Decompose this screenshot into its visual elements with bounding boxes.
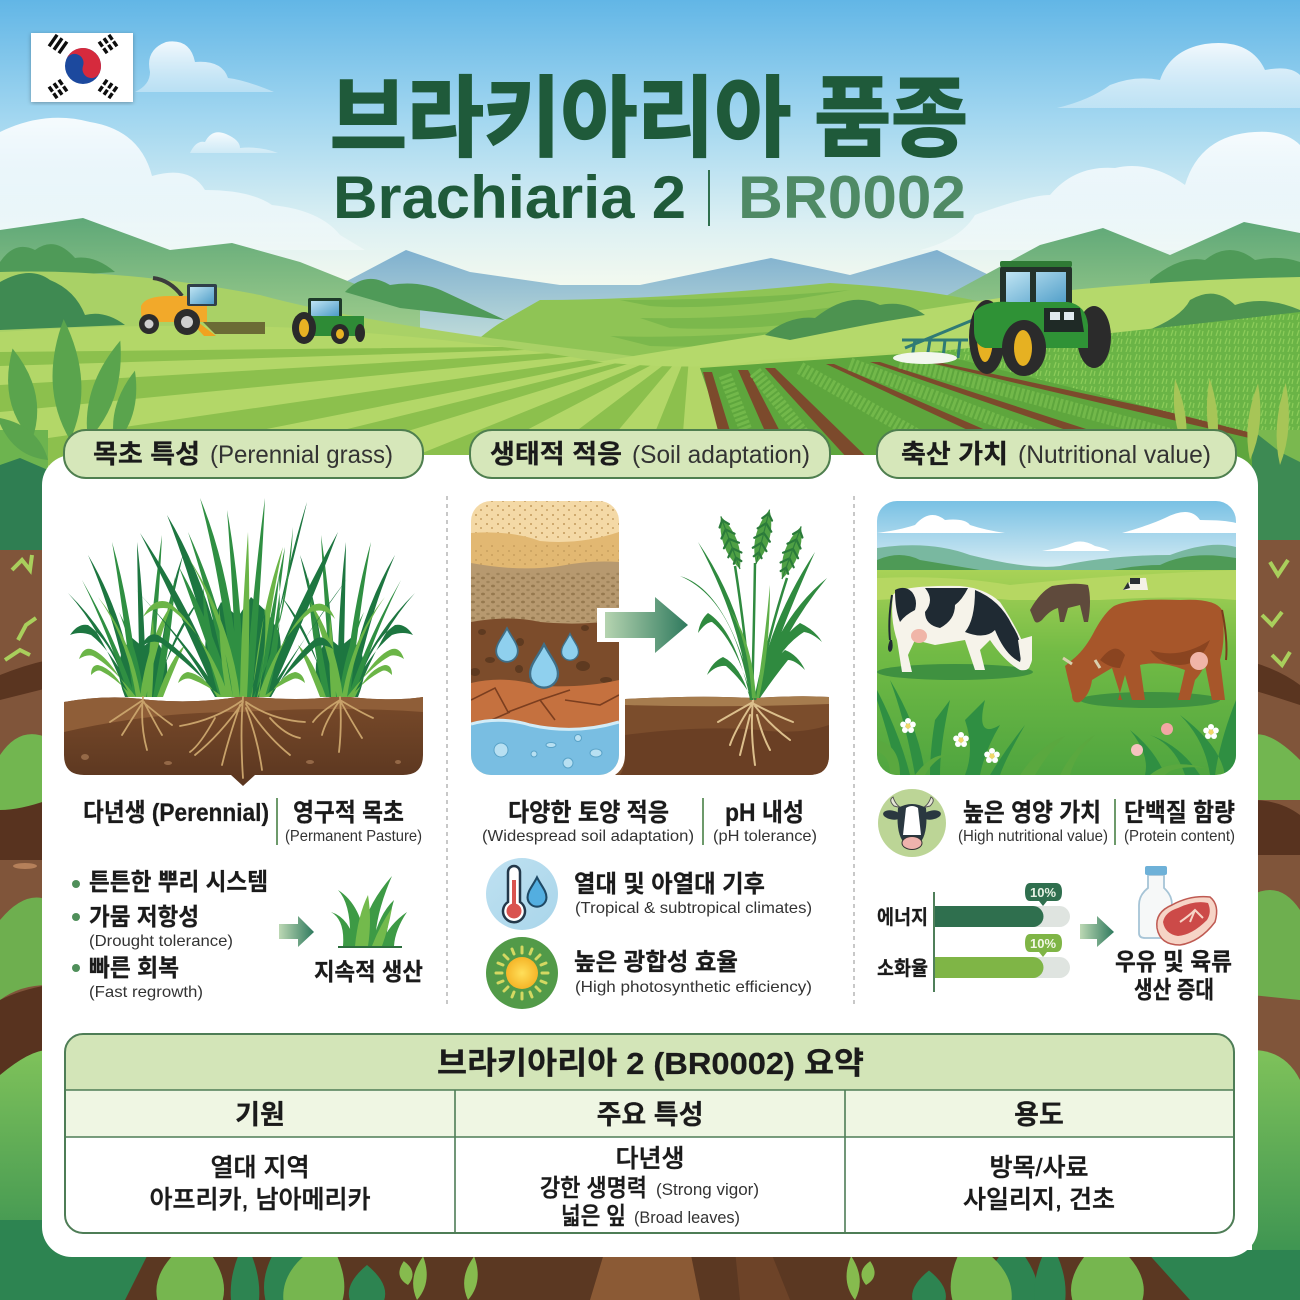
bullet list: grass traits: (Fast regrowth) <box>89 984 203 1001</box>
foreground grass and flowers <box>877 680 1236 775</box>
icon: grass tuft <box>331 876 407 948</box>
label: increased milk and meat production <box>1115 949 1232 1004</box>
column: main traits: 강한 생명력 <box>540 1175 647 1202</box>
column: main traits: 넓은 잎 <box>561 1203 626 1230</box>
text: soil adaptation and pH tolerance: pH 내성 <box>725 799 804 827</box>
text: tropical climates: (Tropical & subtropical climates) <box>575 900 812 917</box>
table title: 브라키아리아 2 (BR0002) 요약 <box>437 1046 864 1081</box>
section heading: nutritional value: (Nutritional value) <box>1018 441 1211 469</box>
text: perennial and permanent pasture: 다년생 (Perennial) <box>83 799 269 827</box>
holstein cow <box>888 586 1032 672</box>
text: nutritional value and protein: 단백질 함량 <box>1124 799 1235 827</box>
icon: orange combine harvester <box>139 278 265 336</box>
illustration: grass clumps with roots in soil <box>64 498 423 786</box>
section heading: nutritional value <box>877 430 1236 478</box>
column: origin: 아프리카, 남아메리카 <box>150 1186 370 1214</box>
section heading: nutritional value: 축산 가치 <box>901 439 1008 469</box>
label: increased milk and meat production: 우유 및 육류 <box>1115 949 1232 976</box>
bar chart: energy and digestibility: 에너지 <box>877 906 928 929</box>
section heading: perennial grass: (Perennial grass) <box>210 441 393 469</box>
text: perennial and permanent pasture: 영구적 목초 <box>293 799 404 827</box>
section heading: soil adaptation: (Soil adaptation) <box>632 441 810 469</box>
arrow: to sustained production <box>279 916 314 947</box>
flag of South Korea <box>31 33 133 102</box>
column: origin: 열대 지역 <box>211 1154 309 1182</box>
label: increased milk and meat production: 생산 증대 <box>1134 977 1214 1004</box>
column: main traits: 다년생 <box>615 1145 685 1173</box>
background: bottom strip of soil and leaves <box>0 1220 1300 1300</box>
bullet list: grass traits <box>72 869 268 1001</box>
section heading: perennial grass <box>64 430 423 478</box>
text: perennial and permanent pasture: (Permanent Pasture) <box>285 828 422 845</box>
column: main traits <box>540 1100 759 1230</box>
background: left side strip of soil and leaves <box>0 430 48 1300</box>
text: nutritional value and protein: 높은 영양 가치 <box>963 799 1101 827</box>
illustration: soil profile layers <box>470 501 619 775</box>
text: photosynthetic efficiency: 높은 광합성 효율 <box>574 949 738 976</box>
icon: small green tractor <box>292 298 365 344</box>
bullet list: grass traits: 빠른 회복 <box>89 955 179 982</box>
arrow: to milk and meat production <box>1080 916 1114 947</box>
bullet list: grass traits: 가뭄 저항성 <box>89 904 199 931</box>
text: photosynthetic efficiency: (High photosynthetic efficiency) <box>575 979 812 996</box>
bar chart: energy and digestibility: 소화율 <box>877 957 928 980</box>
title: 브라키아리아 품종 <box>330 69 968 168</box>
bullet list: grass traits: 튼튼한 뿌리 시스템 <box>89 869 268 896</box>
section heading: soil adaptation <box>470 430 830 478</box>
background: textured crop field at right <box>930 312 1300 445</box>
text: soil adaptation and pH tolerance: (pH tolerance) <box>713 828 817 845</box>
column: main traits: (Strong vigor) <box>656 1180 759 1199</box>
icon: milk bottle and steak <box>1139 866 1217 945</box>
text: tropical climates <box>574 871 812 917</box>
brown cow <box>1063 600 1226 702</box>
text: perennial and permanent pasture <box>83 798 422 845</box>
icon: large green tractor with harrow <box>893 261 1111 376</box>
text: nutritional value and protein: (High nutritional value) <box>958 828 1108 845</box>
title: Brachiaria 2 <box>333 164 686 231</box>
bar chart: energy and digestibility: 10% <box>1030 885 1056 900</box>
text: soil adaptation and pH tolerance: (Widespread soil adaptation) <box>482 828 694 845</box>
text: soil adaptation and pH tolerance: 다양한 토양 적응 <box>508 799 669 827</box>
background: mountains and hills <box>0 218 1300 470</box>
text: nutritional value and protein <box>958 799 1235 845</box>
background: right side strip of soil and leaves <box>1252 430 1300 1300</box>
bullet list: grass traits: (Drought tolerance) <box>89 933 233 950</box>
text: photosynthetic efficiency <box>574 949 812 996</box>
column: uses: 용도 <box>1014 1100 1064 1130</box>
background: foliage at upper corners <box>0 318 1292 468</box>
section heading: perennial grass: 목초 특성 <box>93 439 200 469</box>
background: sky with clouds <box>0 0 1300 300</box>
column: origin: 기원 <box>235 1100 285 1130</box>
label: sustained production: 지속적 생산 <box>314 959 423 986</box>
icon: sun <box>486 937 558 1009</box>
column: main traits: (Broad leaves) <box>634 1208 740 1227</box>
column: origin <box>150 1100 370 1214</box>
arrow: soil to plant <box>601 597 688 653</box>
illustration: plant growing in soil <box>615 508 829 775</box>
small brown cow <box>1030 584 1090 622</box>
far holstein cow <box>1123 578 1148 590</box>
title <box>330 69 968 231</box>
column: uses: 방목/사료 <box>990 1154 1088 1182</box>
icon: thermometer and water drop <box>486 858 558 930</box>
section heading: soil adaptation: 생태적 적응 <box>490 439 622 469</box>
column: main traits: 주요 특성 <box>597 1100 703 1130</box>
column: uses: 사일리지, 건초 <box>963 1186 1115 1214</box>
text: soil adaptation and pH tolerance <box>482 798 817 845</box>
background: striped foreground fields <box>0 320 1300 470</box>
text: nutritional value and protein: (Protein content) <box>1124 828 1235 845</box>
illustration: cows grazing in pasture <box>877 501 1236 775</box>
bar chart: energy and digestibility: 10% <box>1030 936 1056 951</box>
bar chart: energy and digestibility <box>877 883 1070 992</box>
text: tropical climates: 열대 및 아열대 기후 <box>574 871 765 898</box>
title: BR0002 <box>738 164 966 231</box>
icon: cow face badge <box>878 789 946 857</box>
summary table <box>65 1034 1234 1233</box>
column: uses <box>963 1100 1115 1214</box>
main white panel <box>42 455 1258 1257</box>
